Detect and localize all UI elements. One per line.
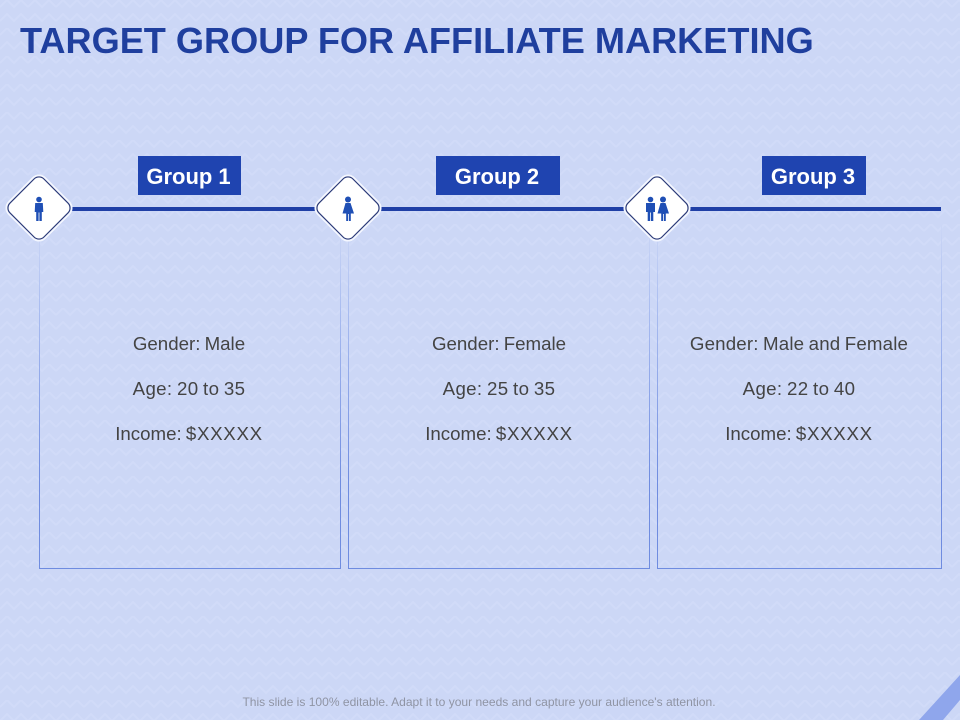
panel: group 3 — [657, 225, 942, 569]
text block: group 2: Gender: Female — [432, 333, 566, 354]
text block: group 2: Age: 25 to 35 — [443, 378, 555, 399]
text block: group 2: Income: $XXXXX — [425, 423, 573, 444]
text block: group 1: Income: $XXXXX — [115, 423, 263, 444]
heading: group 3 — [762, 156, 866, 195]
icon: male and female diamond — [624, 174, 690, 242]
text block: group 3: Gender: Male and Female — [690, 333, 908, 354]
icon: male diamond — [6, 174, 72, 242]
heading: group 2 — [436, 156, 560, 195]
corner stripe — [919, 675, 960, 720]
text block: group 1: Gender: Male — [133, 333, 245, 354]
panel: group 2 — [348, 225, 650, 569]
text block: group 2 — [425, 333, 573, 444]
text block: group 1 — [115, 333, 263, 444]
text block: group 3: Age: 22 to 40 — [743, 378, 855, 399]
panel: group 1 — [39, 225, 341, 569]
text block: group 3 — [690, 333, 908, 444]
footer note: This slide is 100% editable. Adapt it to your needs and capture your audience's attention. — [242, 695, 716, 709]
timeline line — [39, 207, 941, 210]
heading: group 2: Group 2 — [455, 164, 539, 189]
heading: group 3: Group 3 — [771, 164, 855, 189]
icon: female diamond — [314, 174, 382, 242]
title: TARGET GROUP FOR AFFILIATE MARKETING — [20, 20, 814, 61]
text block: group 3: Income: $XXXXX — [725, 423, 873, 444]
text block: group 1: Age: 20 to 35 — [133, 378, 245, 399]
heading: group 1: Group 1 — [146, 164, 231, 189]
heading: group 1 — [138, 156, 241, 195]
